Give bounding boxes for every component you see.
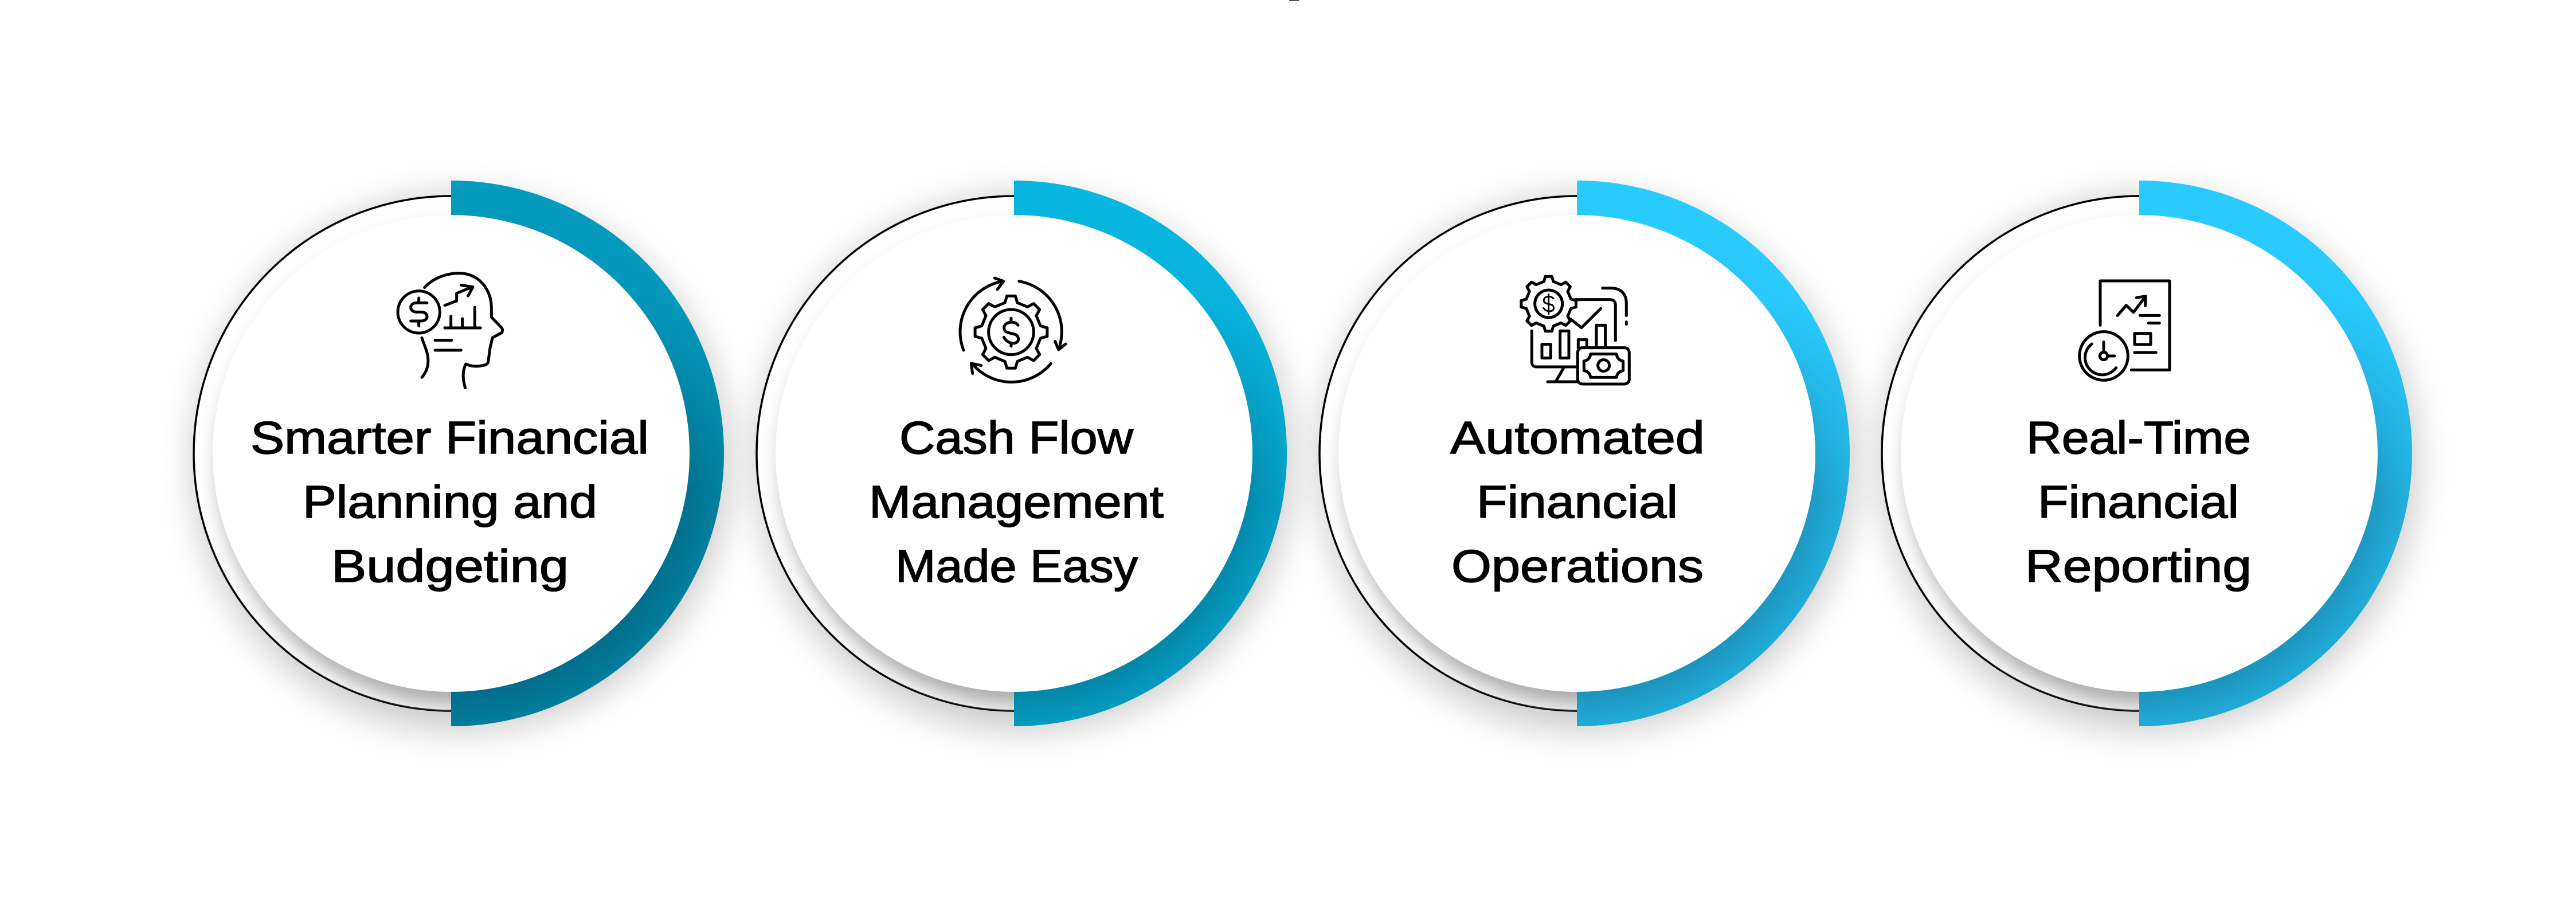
icon: gear with dollar and cycle arrows: [960, 278, 1066, 382]
panel: Automated Financial Operations: [1319, 181, 1855, 731]
label: Planning and: [303, 476, 597, 527]
label: Automated: [1450, 412, 1705, 463]
label: Financial: [1477, 476, 1678, 527]
icon: report with clock: [2080, 281, 2170, 380]
label: Reporting: [2025, 541, 2252, 592]
panel: Cash Flow Management Made Easy: [756, 181, 1293, 731]
label: Cash Flow: [899, 412, 1133, 463]
label: [1450, 412, 1705, 592]
label: Real-Time: [2026, 412, 2251, 463]
label: Financial: [2038, 476, 2239, 527]
label: [2025, 412, 2252, 592]
disc with ring and arc: [193, 181, 730, 731]
icon: monitor with gear, bars and banknote: [1521, 276, 1629, 384]
label: Made Easy: [895, 541, 1138, 592]
label: Budgeting: [331, 541, 569, 592]
disc with ring and arc: [1881, 181, 2418, 731]
label: Smarter Financial: [250, 412, 649, 463]
panel: Real-Time Financial Reporting: [1881, 181, 2418, 731]
label: Management: [869, 476, 1164, 527]
panel: Smarter Financial Planning and Budgeting: [193, 181, 730, 731]
icon: head with coin and chart: [398, 273, 503, 388]
disc with ring and arc: [756, 181, 1293, 731]
disc with ring and arc: [1319, 181, 1855, 731]
label: Operations: [1451, 541, 1704, 592]
label: [250, 412, 649, 592]
clipped heading fragment at top edge: [1289, 0, 1299, 1]
label: [869, 412, 1164, 592]
